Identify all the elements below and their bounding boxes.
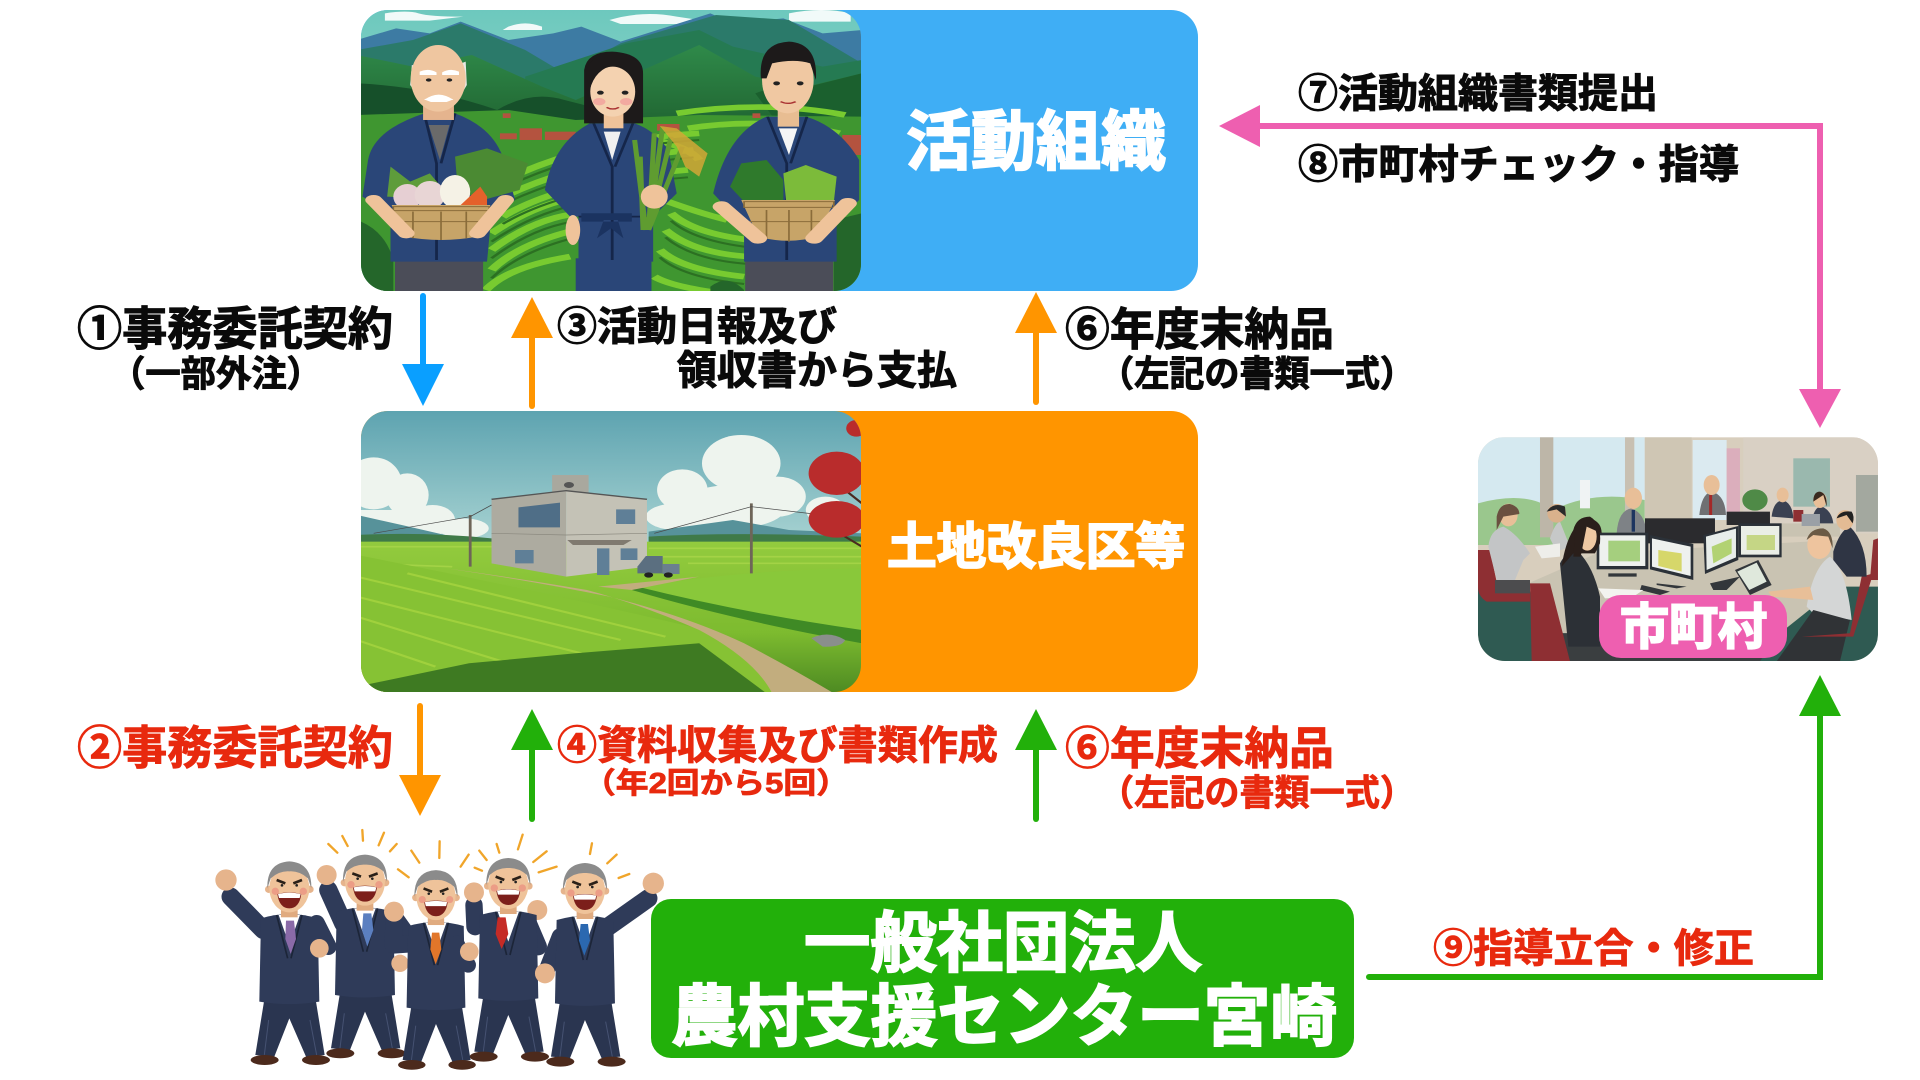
man: second from left [317,855,413,1058]
arrow: ③ payment up (orange) [511,297,553,409]
monitors [1597,512,1782,595]
text: ① 事務委託契約: （一部外注） [110,353,322,394]
text: ④ 資料収集及び書類作成: （年2回から5回） [583,767,849,800]
text: ③ 活動日報及び [557,305,957,393]
label: 活動組織: 活動組織 [906,105,1166,178]
text: ④ 資料収集及び書類作成 [557,724,998,800]
man: centre [384,870,479,1070]
label: 土地改良区等: 土地改良区等 [887,519,1185,575]
label: 市町村: 市町村 [1620,601,1767,655]
arrow: ② contract down (orange) [399,703,441,816]
text: ① 事務委託契約 [77,303,393,394]
arrow: ⑦⑧ municipality to organisation (pink) [1219,105,1841,428]
man: far right [535,863,664,1067]
arrow: ⑥ delivery up (green) [1015,709,1057,822]
text: ④ 資料収集及び書類作成: ④資料収集及び書類作成 [557,724,998,768]
arrow: ⑨ centre to municipality (green) [1369,675,1841,977]
text: ① 事務委託契約: ①事務委託契約 [77,303,393,355]
text: ⑧ 市町村チェック・指導: ⑧市町村チェック・指導 [1298,143,1739,187]
text: ③ 活動日報及び: ③活動日報及び [557,305,837,349]
text: ⑥ 年度末納品 (red): ⑥年度末納品 [1065,723,1334,774]
text: ⑦ 活動組織書類提出: ⑦活動組織書類提出 [1298,72,1658,116]
seated staff [1478,504,1878,661]
text: ⑥ 年度末納品 (black): （左記の書類一式） [1099,353,1415,394]
arrow: ① contract down (blue) [402,293,444,406]
standing staff [1617,475,1833,533]
man: far left [215,861,330,1065]
text: ⑥ 年度末納品 (red): （左記の書類一式） [1099,772,1415,813]
text: ⑥ 年度末納品 (black) [1065,304,1415,394]
label: 市町村 [1599,595,1787,658]
panel: 活動組織 [357,7,1198,293]
building [492,475,647,577]
arrow: ⑥ delivery up (orange) [1015,292,1057,405]
person: young man with greens basket [713,42,859,293]
maple tree [809,420,866,547]
person: woman with rice sheaf [545,52,708,293]
text: ⑥ 年度末納品 (black): ⑥年度末納品 [1065,304,1334,355]
illustration: five cheering men in suits [215,830,664,1070]
kei truck [637,556,680,578]
radiating lines [328,830,629,878]
man: fourth from left [464,858,549,1062]
panel: 一般社団法人 農村支援センター宮崎: 農村支援センター宮崎 [671,980,1337,1055]
clouds [346,435,845,538]
text: ③ 活動日報及び: 領収書から支払 [677,349,957,393]
panel: 一般社団法人 農村支援センター宮崎: 一般社団法人 [804,906,1202,980]
arrow: ④ documents up (green) [511,709,553,822]
panel: 市町村 [1478,437,1878,661]
person: elder man with vegetable basket [362,45,528,293]
illustration: municipal office [1478,437,1878,661]
illustration: building among rice fields [346,410,866,693]
panel: 土地改良区等 [346,410,1198,693]
text: ⑨ 指導立合・修正: ⑨指導立合・修正 [1433,927,1754,971]
illustration: farmers with terraced fields [357,7,868,293]
text: ⑥ 年度末納品 (red) [1065,723,1415,813]
panel: 一般社団法人 農村支援センター宮崎 [651,899,1354,1058]
text: ② 事務委託契約: ②事務委託契約 [77,722,393,774]
